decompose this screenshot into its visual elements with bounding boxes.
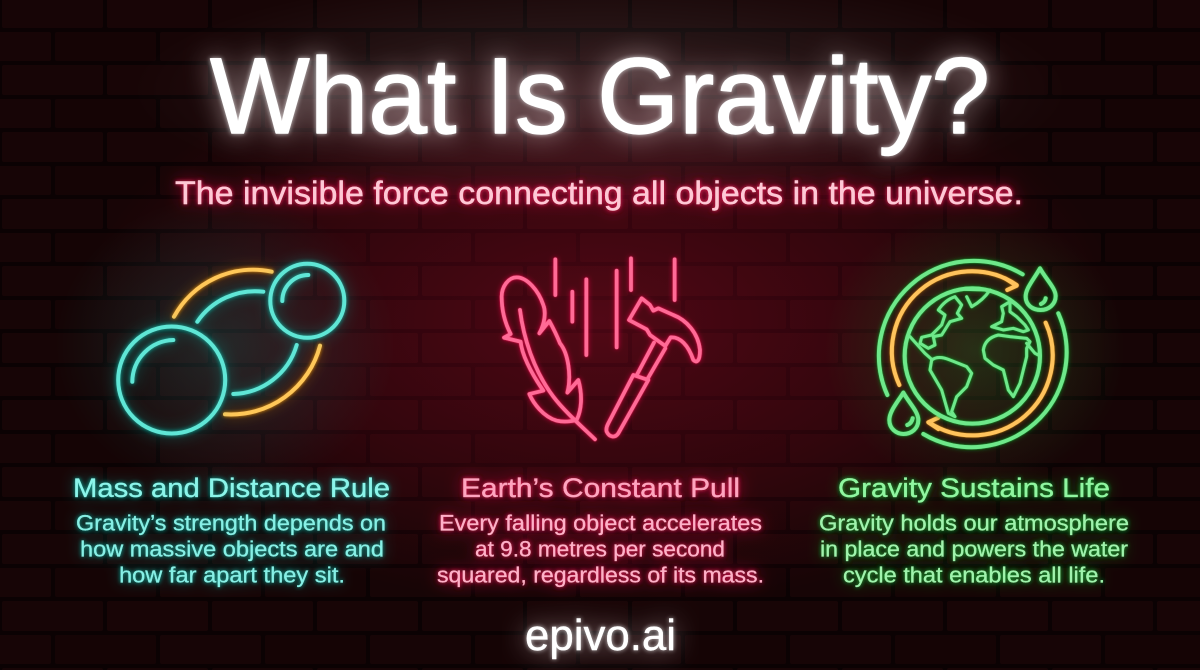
panel: gravity sustains life [819, 261, 1129, 588]
text block: mass and distance description: how massive objects are and [80, 536, 384, 562]
footer brand: epivo.ai [525, 611, 676, 660]
subtitle: The invisible force connecting all objects in the universe. [175, 175, 1023, 211]
text block: mass and distance description: how far apart they sit. [119, 562, 345, 588]
text block: mass and distance description [76, 510, 386, 588]
icon: falling feather and hammer [502, 258, 700, 439]
text block: sustains life description: in place and powers the water [820, 536, 1129, 562]
text block: sustains life description: Gravity holds our atmosphere [819, 510, 1129, 536]
text block: mass and distance description: Gravity’s strength depends on [76, 510, 386, 536]
text block: earth's pull description: squared, regardless of its mass. [437, 562, 764, 588]
panel: mass and distance [73, 264, 390, 588]
heading: mass and distance rule: Mass and Distance Rule [73, 473, 390, 503]
heading: gravity sustains life: Gravity Sustains Life [838, 473, 1110, 503]
text block: sustains life description: cycle that enables all life. [843, 562, 1105, 588]
title: What Is Gravity? [210, 35, 990, 156]
icon: two spheres with orbit arcs [118, 264, 344, 434]
text block: earth's pull description [437, 510, 764, 588]
text block: earth's pull description: at 9.8 metres per second [475, 536, 725, 562]
panel: earth's constant pull [437, 258, 764, 588]
text block: earth's pull description: Every falling object accelerates [439, 510, 762, 536]
icon: earth with water cycle [879, 261, 1067, 447]
heading: earth's constant pull: Earth’s Constant Pull [461, 473, 740, 503]
text block: sustains life description [819, 510, 1129, 588]
